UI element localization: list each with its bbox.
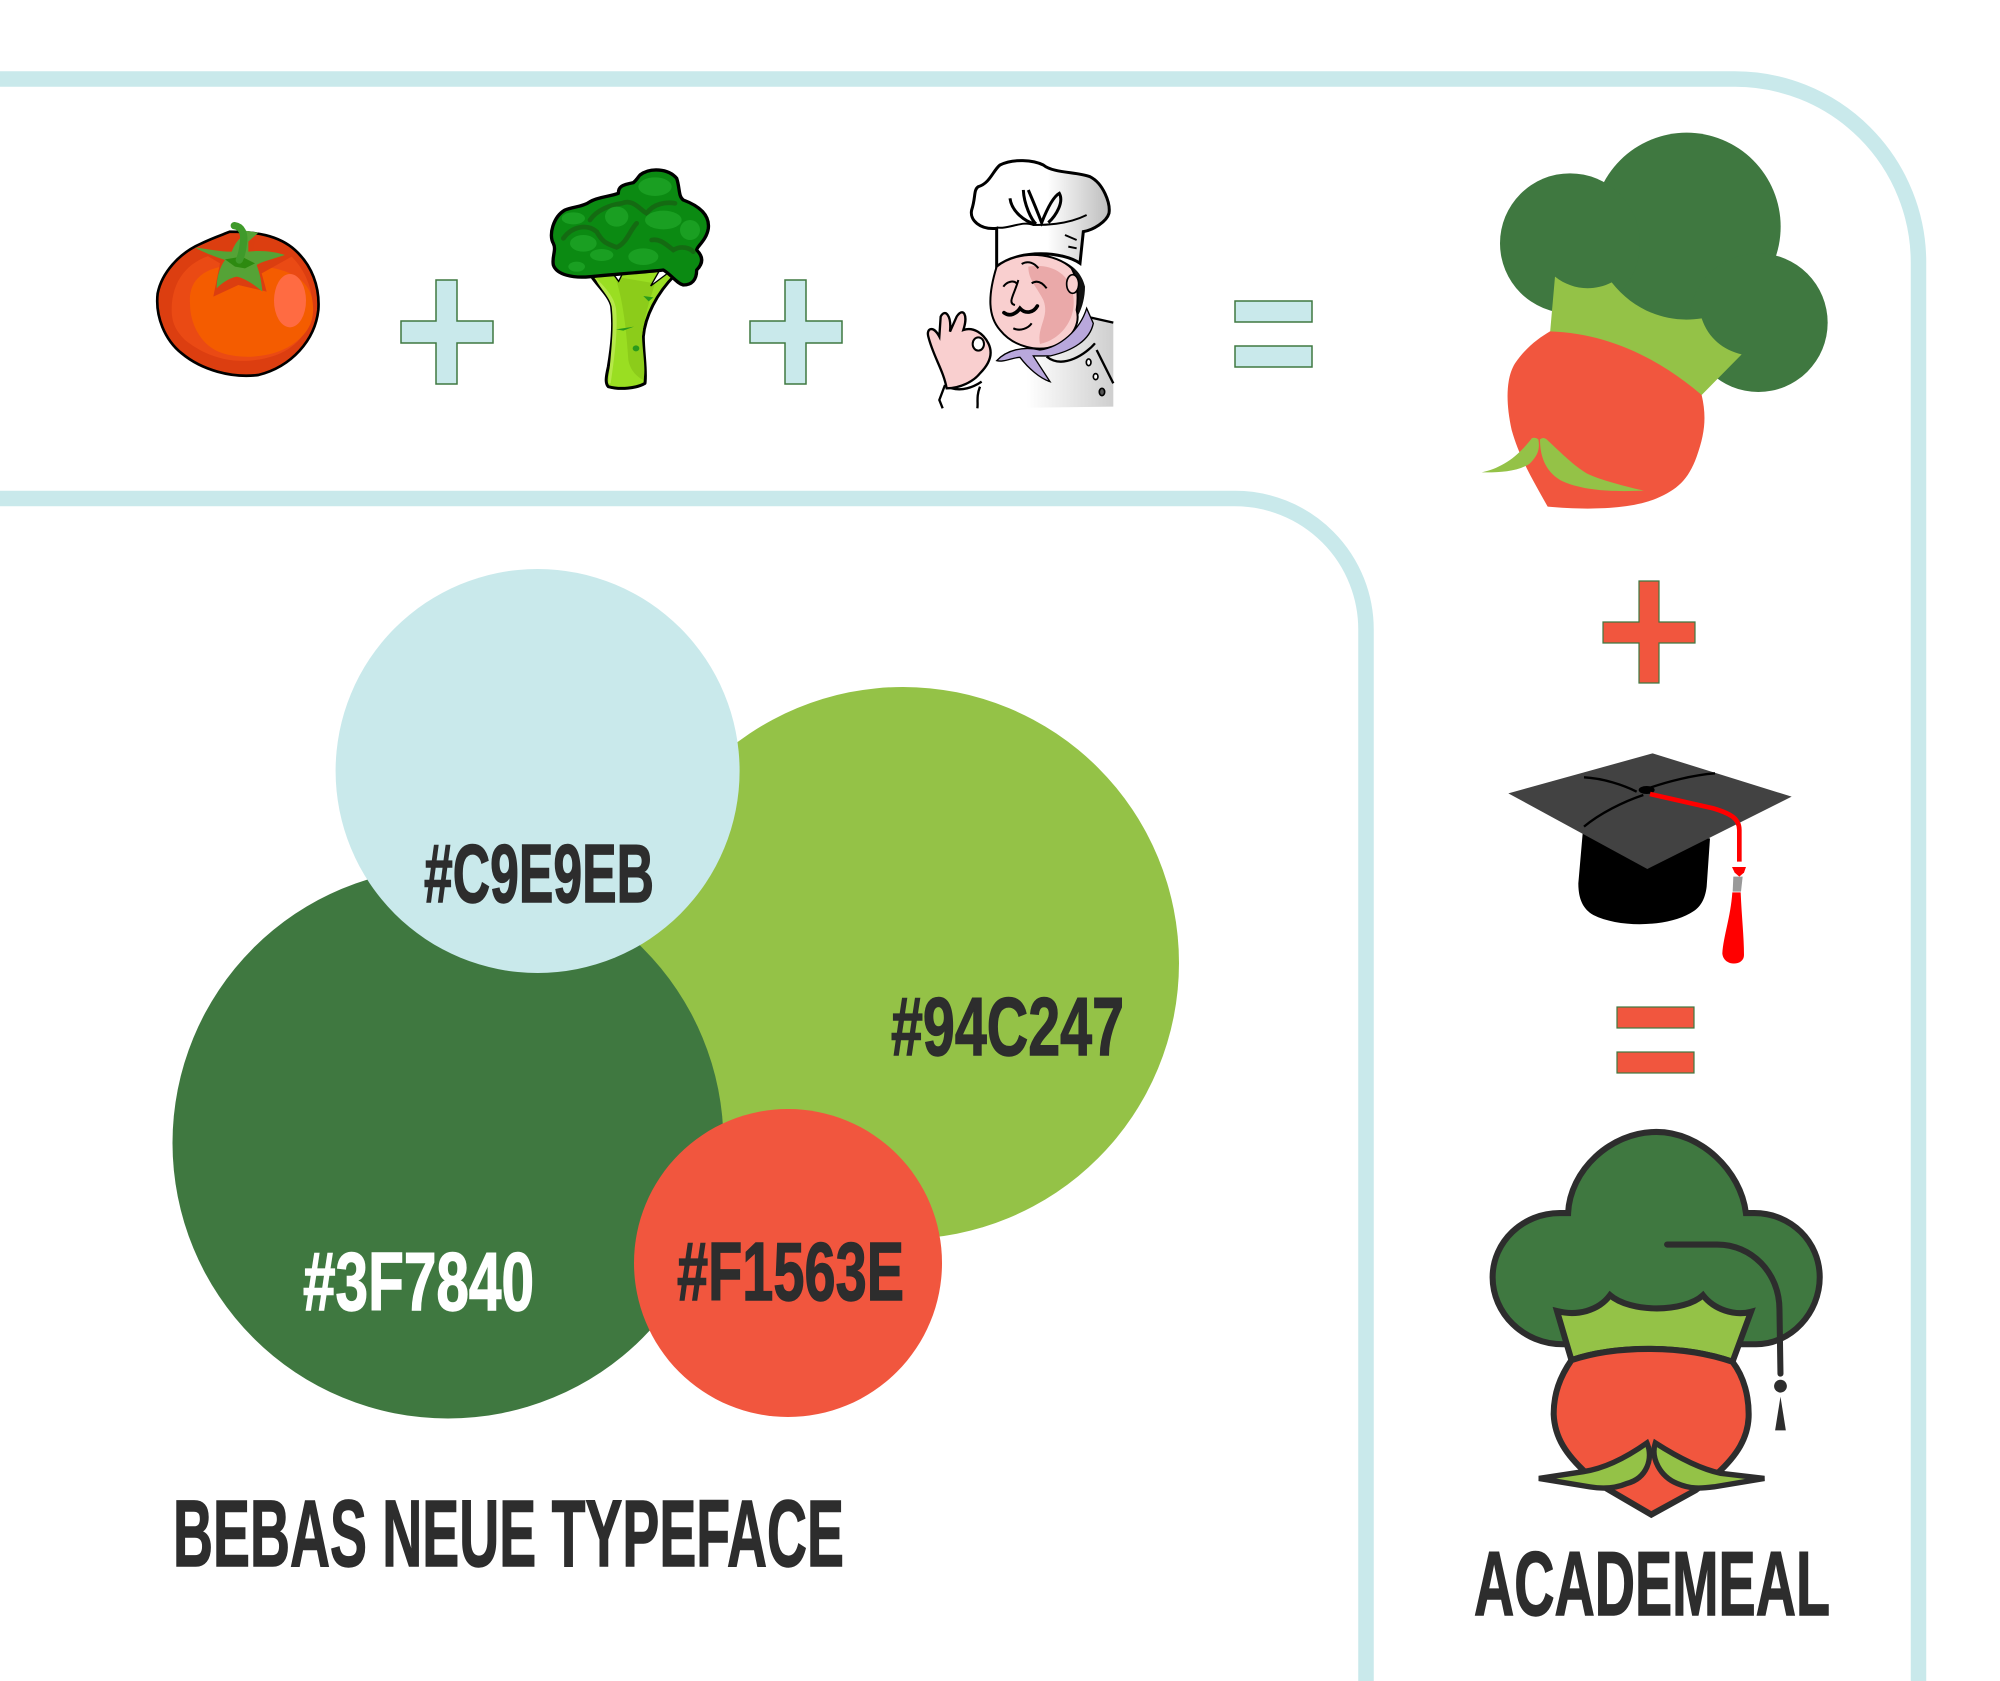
label: C9E9EB: #C9E9EB: [424, 827, 654, 920]
typeface caption: BEBAS NEUE TYPEFACE: [173, 1481, 844, 1587]
label: F1563E: #F1563E: [677, 1225, 904, 1318]
label: 3F7840: #3F7840: [303, 1235, 534, 1328]
swatch: pale blue: [336, 569, 740, 973]
icon: graduation cap: [1508, 753, 1792, 964]
icon: chef giving ok sign: [928, 161, 1113, 408]
label: 94C247: #94C247: [891, 980, 1124, 1073]
logo: academeal mark: [1493, 1132, 1820, 1515]
icon: broccoli-tomato combined mark: [1482, 133, 1828, 509]
icon: plus two: [750, 280, 842, 384]
icon: plus red: [1603, 581, 1695, 683]
icon: broccoli: [551, 170, 708, 388]
icon: tomato: [157, 226, 319, 376]
swatch: light green: [627, 687, 1179, 1239]
swatch: dark green: [172, 868, 724, 1418]
icon: equals red: [1617, 1007, 1694, 1073]
inner frame border: [0, 498, 1366, 1681]
swatch: coral red: [634, 1109, 942, 1417]
color swatches venn: [172, 569, 1179, 1418]
icon: equals light: [1235, 301, 1312, 367]
icon: plus one: [401, 280, 493, 384]
